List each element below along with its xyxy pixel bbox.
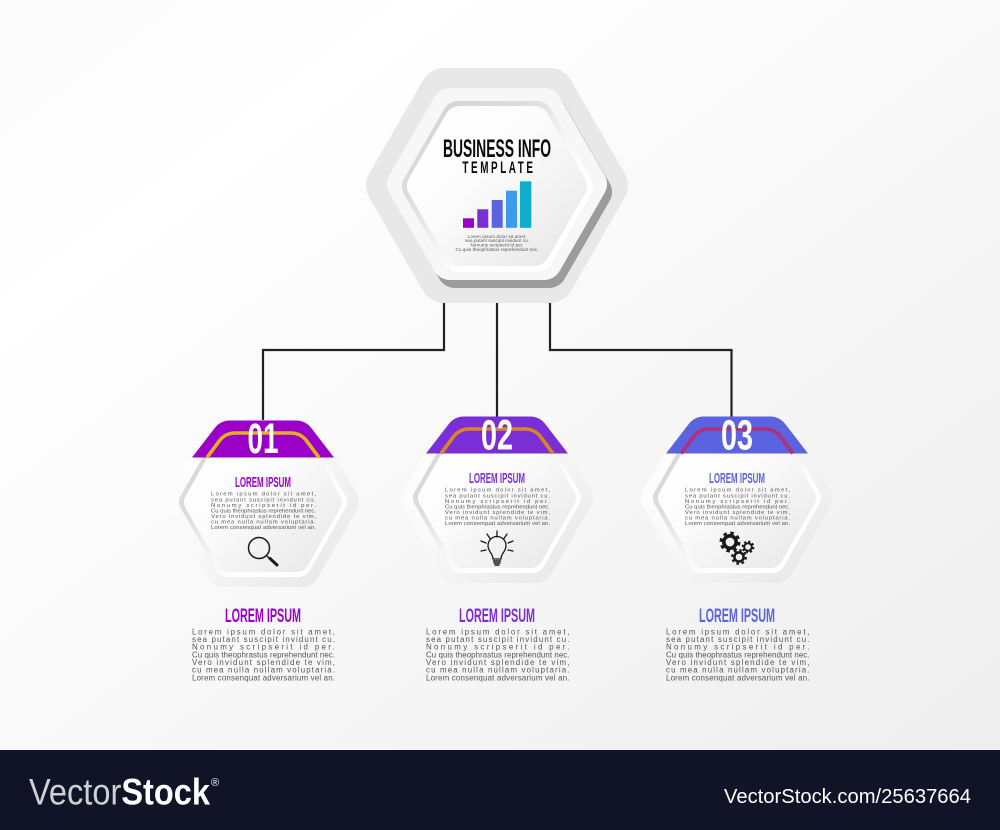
caption 01 text: sea putant suscipit invidunt cu.: [192, 635, 335, 644]
card 03 text: Nonumy scripserit id per.: [685, 499, 790, 505]
card 02 text: sea putant suscipit invidunt cu.: [445, 493, 550, 499]
card 02 text: Vero invidunt splendide te vim,: [445, 510, 550, 516]
central hexagon: [390, 92, 604, 279]
footer registered mark: ®: [211, 777, 219, 789]
card 01 text: sea putant suscipit invidunt cu.: [211, 497, 316, 503]
card 03 plates: [657, 429, 817, 567]
caption 02 heading: LOREM IPSUM: [459, 606, 535, 627]
caption 01 text: [192, 627, 335, 682]
caption 01 text: Cu quis theophrastus reprehendunt nec.: [192, 650, 335, 659]
card 02 outer plate: [500, 501, 592, 583]
card 02 text: Cu quis theophrastus reprehendunt nec.: [445, 504, 550, 510]
footer logo: VectorStock: [29, 772, 210, 812]
caption 03 text: Nonumy scripserit id per.: [666, 643, 810, 652]
card 02 number: 02: [481, 412, 513, 460]
card 01 number: 01: [247, 415, 279, 463]
central hexagon outer plate: [390, 92, 604, 279]
central hexagon shadow: [410, 114, 594, 270]
central hexagon face: [423, 122, 571, 250]
caption 03: [666, 606, 810, 682]
card 01 face: [196, 444, 330, 560]
card 01 purple tab: [192, 420, 334, 458]
caption 01 text: Lorem ipsum dolor sit amet,: [192, 627, 335, 636]
card 02 text: cu mea nulla nullam voluptaria.: [445, 516, 550, 522]
card 03 text: [685, 488, 790, 527]
caption 03 text: Lorem consenquat adversarium vel an.: [666, 673, 810, 682]
icon: magnifier: [248, 538, 277, 565]
caption 02 text: Lorem ipsum dolor sit amet,: [426, 627, 570, 636]
caption 01 text: Lorem consenquat adversarium vel an.: [192, 673, 335, 682]
central description: Cu quis theophrastus reprehendunt nec.: [456, 247, 538, 252]
central title: BUSINESS INFO: [443, 135, 551, 163]
central description: [456, 234, 538, 252]
caption 03 text: [666, 627, 810, 682]
card 03 text: Cu quis theophrastus reprehendunt nec.: [685, 504, 790, 510]
caption 02 text: sea putant suscipit invidunt cu.: [426, 635, 570, 644]
card 02 ring: [425, 435, 569, 561]
caption 03 heading: LOREM IPSUM: [699, 606, 775, 627]
card 02 text: Nonumy scripserit id per.: [445, 499, 550, 505]
card 02 plates: [417, 429, 577, 567]
caption 01: [192, 606, 335, 682]
icon: light bulb: [481, 531, 513, 565]
card 03: [657, 412, 817, 567]
central hexagon white plate: [405, 106, 589, 262]
card 01 plates: [183, 433, 343, 571]
card 02 heading: LOREM IPSUM: [469, 471, 525, 487]
card 03 text: sea putant suscipit invidunt cu.: [685, 493, 790, 499]
caption 03 text: Vero invidunt splendide te vim,: [666, 658, 810, 667]
caption 01 text: cu mea nulla nullam voluptaria.: [192, 666, 335, 675]
caption 03 text: Cu quis theophrastus reprehendunt nec.: [666, 650, 810, 659]
card 01 tab line: [207, 433, 319, 458]
card 02 tab line: [441, 429, 553, 454]
card 02 face: [430, 440, 564, 556]
icon: gears: [721, 533, 753, 564]
card 03 text: cu mea nulla nullam voluptaria.: [685, 516, 790, 522]
card 03 tab line: [681, 429, 793, 454]
card 01 text: Vero invidunt splendide te vim,: [211, 514, 316, 520]
card 03 text: Lorem ipsum dolor sit amet,: [685, 488, 790, 494]
connector lines: [263, 303, 732, 420]
card 03 number: 03: [721, 412, 753, 460]
card 02 text: [445, 488, 550, 527]
card 03 heading: LOREM IPSUM: [709, 471, 765, 487]
central description: Nonumy scripserit id per.: [470, 243, 524, 248]
card 01 text: cu mea nulla nullam voluptaria.: [211, 520, 316, 526]
caption 03 text: sea putant suscipit invidunt cu.: [666, 635, 810, 644]
central subtitle: TEMPLATE: [462, 158, 536, 177]
footer bar: [0, 750, 1000, 830]
card 02: [417, 412, 577, 567]
bar chart icon: [463, 181, 531, 228]
caption 01 heading: LOREM IPSUM: [225, 606, 301, 627]
card 03 text: Vero invidunt splendide te vim,: [685, 510, 790, 516]
caption 02 text: cu mea nulla nullam voluptaria.: [426, 666, 570, 675]
card 01: [183, 415, 343, 571]
card 02 text: Lorem consenquat adversarium vel an.: [445, 521, 550, 527]
central description: sea putant suscipit invidunt cu.: [465, 238, 529, 243]
card 03 outer plate: [770, 554, 802, 583]
caption 03 text: cu mea nulla nullam voluptaria.: [666, 666, 810, 675]
card 01 outer plate: [236, 486, 359, 587]
caption 01 text: Nonumy scripserit id per.: [192, 643, 335, 652]
card 01 text: Lorem ipsum dolor sit amet,: [211, 492, 316, 498]
caption 02 text: Vero invidunt splendide te vim,: [426, 658, 570, 667]
card 03 text: Lorem consenquat adversarium vel an.: [685, 521, 790, 527]
caption 02 text: Nonumy scripserit id per.: [426, 643, 570, 652]
card 01 text: [211, 492, 316, 531]
caption 02: [426, 606, 570, 682]
card 01 text: Lorem consenquat adversarium vel an.: [211, 525, 316, 531]
card 01 heading: LOREM IPSUM: [235, 475, 291, 491]
central description: Lorem ipsum dolor sit amet,: [468, 234, 526, 239]
footer image id: VectorStock.com/25637664: [724, 786, 971, 808]
caption 02 text: [426, 627, 570, 682]
card 01 text: Cu quis theophrastus reprehendunt nec.: [211, 508, 316, 514]
card 01 ring: [191, 439, 335, 565]
card 01 text: Nonumy scripserit id per.: [211, 503, 316, 509]
caption 02 text: Lorem consenquat adversarium vel an.: [426, 673, 570, 682]
central hexagon inner ring: [418, 117, 577, 256]
caption 02 text: Cu quis theophrastus reprehendunt nec.: [426, 650, 570, 659]
caption 03 text: Lorem ipsum dolor sit amet,: [666, 627, 810, 636]
card 03 ring: [665, 435, 809, 561]
card 03 blue tab: [666, 416, 808, 454]
card 03 face: [670, 440, 804, 556]
card 02 text: Lorem ipsum dolor sit amet,: [445, 488, 550, 494]
card 02 violet tab: [426, 416, 568, 454]
caption 01 text: Vero invidunt splendide te vim,: [192, 658, 335, 667]
